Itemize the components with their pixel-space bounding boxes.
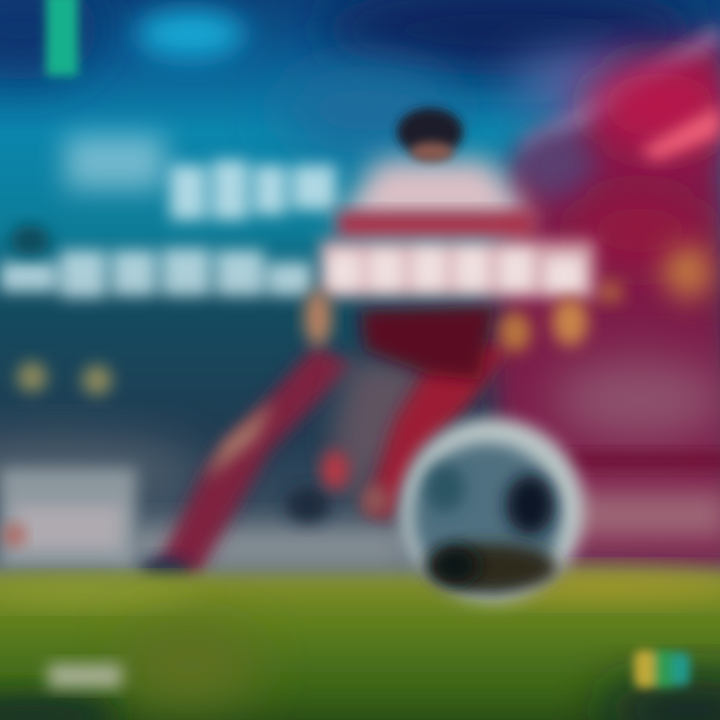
panel: goal net: [0, 468, 136, 568]
player: head: [397, 108, 463, 162]
player: rear leg: [155, 345, 355, 580]
icon: multicolour badge: [634, 650, 690, 688]
football: [400, 418, 584, 602]
player: middle shadow: [330, 360, 430, 500]
icon: green tab at top: [46, 0, 78, 76]
player: torso shirt: [335, 160, 535, 225]
footer: blurred white logo text: [48, 664, 122, 688]
heading: blurred white title lines: [0, 135, 336, 298]
player: second boot: [286, 487, 330, 523]
player: [139, 108, 595, 586]
player: shorts: [360, 305, 495, 380]
background: red stadium crowd: [490, 25, 720, 570]
player: boot: [139, 558, 191, 586]
player: front leg: [365, 345, 510, 520]
player: arms: [304, 290, 332, 346]
ground: grass pitch: [0, 571, 720, 720]
icon: small gold markers: [17, 362, 112, 395]
icon: dark badge on title: [10, 225, 50, 255]
